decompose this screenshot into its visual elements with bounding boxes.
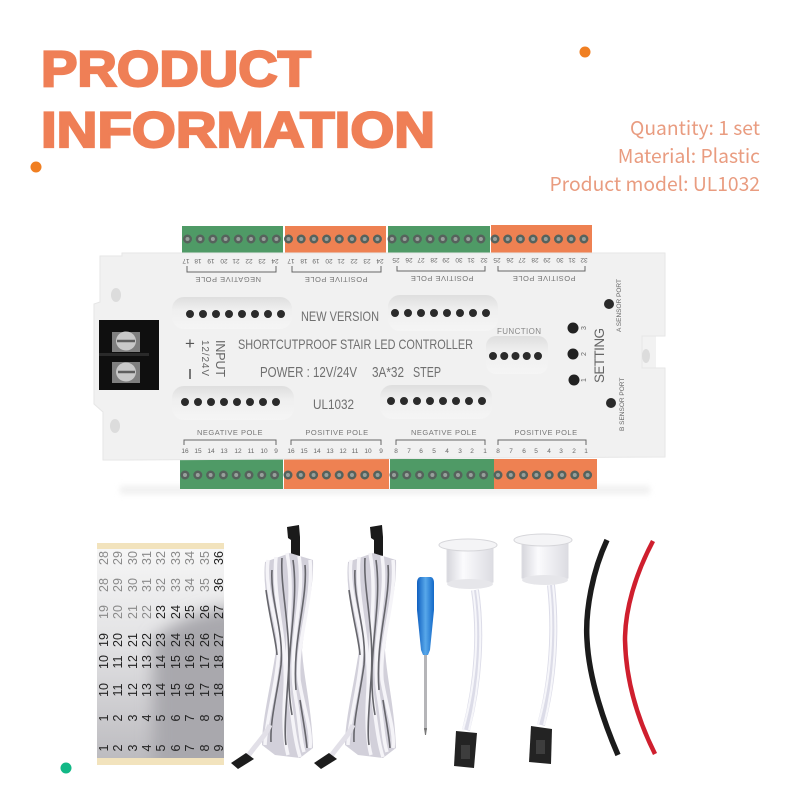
sticker numbers (97, 551, 226, 751)
sticker numbers: 26 (198, 633, 212, 647)
sticker numbers: 35 (198, 551, 212, 565)
sticker numbers: 29 (111, 578, 125, 592)
controller printed text: 2 (581, 352, 588, 356)
sticker numbers: 6 (169, 744, 183, 751)
sticker numbers: 9 (212, 744, 226, 751)
bottom pole labels: 14 (313, 448, 321, 455)
controller printed text: SHORTCUTPROOF STAIR LED CONTROLLER (238, 336, 473, 352)
bottom pole labels: 16 (181, 448, 189, 455)
bottom pole labels: POSITIVE POLE (514, 428, 578, 437)
top terminal blocks (182, 225, 592, 253)
power polarity labels: INPUT (213, 340, 227, 377)
top pole labels: POSITIVE POLE (304, 275, 368, 284)
controller printed text: UL1032 (313, 396, 354, 412)
sticker numbers: 22 (140, 605, 154, 619)
top pole labels: 31 (568, 256, 576, 263)
bottom pole labels: 4 (445, 448, 449, 455)
mounting holes (110, 288, 650, 433)
top pole labels: 32 (580, 256, 588, 263)
controller printed text (238, 279, 626, 431)
controller printed text: STEP (413, 364, 441, 381)
sticker numbers: 21 (126, 605, 140, 619)
power polarity labels: + (185, 334, 195, 353)
sticker numbers: 12 (126, 683, 140, 697)
sticker numbers: 14 (154, 683, 168, 697)
top pole labels: 22 (245, 257, 253, 264)
bottom pole labels: 1 (584, 448, 588, 455)
controller printed text: NEW VERSION (301, 308, 379, 324)
sticker numbers: 3 (126, 714, 140, 721)
title (41, 40, 435, 158)
sensor 1 (439, 539, 497, 768)
top pole labels: 17 (287, 257, 295, 264)
top pole labels: 19 (207, 257, 215, 264)
sticker numbers: 16 (183, 655, 197, 669)
bottom pole labels: 2 (470, 448, 474, 455)
sticker numbers: 11 (111, 683, 125, 696)
controller printed text: 3 (581, 326, 588, 330)
sticker numbers: 3 (126, 744, 140, 751)
sticker numbers: 24 (169, 633, 183, 647)
bottom pole labels: POSITIVE POLE (305, 428, 369, 437)
sticker numbers: 6 (169, 714, 183, 721)
top pole labels: 22 (350, 257, 358, 264)
bottom pole labels: 16 (287, 448, 295, 455)
sticker numbers: 16 (183, 683, 197, 697)
sticker numbers: 5 (154, 714, 168, 721)
bottom pole labels: 1 (483, 448, 487, 455)
top pole labels: 28 (430, 256, 438, 263)
bottom pole labels: NEGATIVE POLE (197, 428, 263, 437)
sticker numbers: 24 (169, 605, 183, 619)
sticker numbers: 7 (183, 744, 197, 751)
top pole labels: 20 (325, 257, 333, 264)
top pole labels: 25 (493, 256, 501, 263)
top pole labels: 31 (467, 256, 475, 263)
bottom pole labels: 8 (394, 448, 398, 455)
sticker numbers: 4 (140, 744, 154, 751)
sticker numbers: 22 (140, 633, 154, 647)
sticker numbers: 20 (111, 633, 125, 647)
recessed vents (172, 295, 548, 420)
sensor ports (604, 299, 616, 408)
controller printed text: POWER : 12V/24V (260, 364, 357, 381)
bottom pole labels: 2 (572, 448, 576, 455)
sticker numbers: 12 (126, 655, 140, 669)
black wire (587, 540, 618, 755)
sticker numbers: 19 (97, 633, 111, 647)
top pole labels: 24 (271, 257, 279, 264)
top pole labels: 30 (556, 256, 564, 263)
controller printed text: B SENSOR PORT (619, 378, 626, 431)
sticker numbers: 30 (126, 551, 140, 565)
bottom pole labels: 6 (419, 448, 423, 455)
top pole labels: POSITIVE POLE (410, 274, 474, 283)
top pole labels: 27 (518, 256, 526, 263)
spec list: Product model: UL1032 (549, 169, 760, 197)
sticker numbers: 36 (212, 551, 226, 565)
sticker numbers: 8 (198, 744, 212, 751)
sticker numbers: 33 (169, 551, 183, 565)
sticker numbers: 20 (111, 605, 125, 619)
cable bundle 1 (231, 525, 313, 769)
sticker numbers: 23 (154, 633, 168, 647)
top pole labels: 25 (392, 256, 400, 263)
sticker numbers: 2 (111, 744, 125, 751)
sticker numbers: 7 (183, 714, 197, 721)
top pole labels: 18 (300, 257, 308, 264)
sticker numbers: 25 (183, 605, 197, 619)
bottom pole labels: 9 (274, 448, 278, 455)
sticker numbers: 25 (183, 633, 197, 647)
sticker numbers: 2 (111, 714, 125, 721)
screwdriver (417, 577, 434, 735)
controller (94, 225, 665, 494)
sticker numbers: 30 (126, 578, 140, 592)
top pole labels: 20 (220, 257, 228, 264)
bottom pole labels: 15 (194, 448, 202, 455)
sticker numbers: 26 (198, 605, 212, 619)
sticker numbers: 34 (183, 578, 197, 592)
bottom pole labels: 12 (234, 448, 242, 455)
bottom pole labels: 13 (220, 448, 228, 455)
sticker numbers: 1 (97, 714, 111, 721)
bottom pole labels: 14 (207, 448, 215, 455)
number sticker sheet (97, 543, 224, 765)
power polarity labels: 12/24V (199, 340, 210, 376)
sticker numbers: 27 (212, 605, 226, 619)
sticker numbers: 18 (212, 683, 226, 697)
bottom pole labels: 11 (352, 448, 359, 455)
sticker numbers: 15 (169, 683, 183, 697)
sticker numbers: 28 (97, 578, 111, 592)
sticker numbers: 13 (140, 683, 154, 697)
top pole labels: 21 (232, 257, 240, 264)
sticker numbers: 34 (183, 551, 197, 565)
sticker numbers: 32 (154, 551, 168, 565)
sensor 2 (514, 534, 572, 764)
sticker numbers: 14 (154, 655, 168, 669)
top pole labels: 29 (442, 256, 450, 263)
controller printed text: FUNCTION (497, 327, 541, 336)
decorative dot: green (60, 762, 72, 774)
sticker numbers: 23 (154, 605, 168, 619)
sticker numbers: 5 (154, 744, 168, 751)
spec list: Material: Plastic (618, 141, 760, 169)
cable bundle 2 (314, 525, 396, 769)
bottom pole labels: 3 (559, 448, 563, 455)
power terminal (99, 320, 159, 390)
power polarity labels (185, 334, 227, 379)
controller printed text: A SENSOR PORT (616, 279, 623, 332)
top pole labels: 32 (480, 256, 488, 263)
top pole labels: 18 (194, 257, 202, 264)
sticker numbers: 36 (212, 578, 226, 592)
controller printed text: SETTING (592, 328, 607, 383)
bottom pole labels: 10 (364, 448, 372, 455)
bottom pole labels: 15 (300, 448, 308, 455)
top pole labels: 23 (258, 257, 266, 264)
title: INFORMATION (41, 101, 435, 158)
sticker numbers: 17 (198, 683, 212, 697)
top pole labels: 23 (363, 257, 371, 264)
controller printed text: 3A*32 (372, 364, 404, 381)
top pole labels: NEGATIVE POLE (195, 275, 261, 284)
sticker numbers: 10 (97, 655, 111, 669)
bottom pole labels: 11 (248, 448, 255, 455)
top pole labels: 28 (531, 256, 539, 263)
bottom pole labels: 6 (522, 448, 526, 455)
sticker numbers: 15 (169, 655, 183, 669)
bottom pole labels: 4 (547, 448, 551, 455)
controller body (94, 253, 665, 460)
spec list (549, 113, 760, 197)
sticker numbers: 9 (212, 714, 226, 721)
title: PRODUCT (41, 40, 311, 97)
top pole labels: 26 (405, 256, 413, 263)
sticker numbers: 1 (97, 744, 111, 751)
bottom pole labels: 12 (339, 448, 347, 455)
bottom pole labels: 7 (509, 448, 513, 455)
function dots (493, 352, 539, 360)
decorative dot: orange top (580, 46, 590, 58)
bottom pole labels: 3 (458, 448, 462, 455)
top pole labels: 17 (182, 257, 190, 264)
sticker numbers: 4 (140, 714, 154, 721)
top pole labels: 27 (417, 256, 425, 263)
sticker numbers: 13 (140, 655, 154, 669)
bottom pole labels (181, 428, 588, 455)
bottom pole labels: 13 (326, 448, 334, 455)
right mounting tab (640, 336, 656, 369)
sticker numbers: 31 (140, 578, 154, 592)
top pole labels: 29 (543, 256, 551, 263)
bottom pole labels: 7 (407, 448, 411, 455)
sticker numbers: 32 (154, 578, 168, 592)
indicator dot rows (185, 313, 487, 402)
top pole labels: 19 (312, 257, 320, 264)
sticker numbers: 29 (111, 551, 125, 565)
sticker numbers: 10 (97, 683, 111, 697)
sticker numbers: 27 (212, 633, 226, 647)
bottom pole labels: 8 (496, 448, 500, 455)
controller printed text: 1 (581, 378, 588, 382)
bottom pole labels: NEGATIVE POLE (411, 428, 477, 437)
spec list: Quantity: 1 set (630, 113, 760, 141)
controller shadow (120, 486, 650, 494)
sticker numbers: 8 (198, 714, 212, 721)
sticker numbers: 18 (212, 655, 226, 669)
bottom pole labels: 10 (260, 448, 268, 455)
decorative dot: orange left (30, 162, 42, 172)
sticker numbers: 11 (111, 655, 125, 668)
top pole labels: 26 (506, 256, 514, 263)
sticker numbers: 21 (126, 633, 140, 647)
red wire (625, 541, 655, 754)
sticker numbers: 33 (169, 578, 183, 592)
sticker numbers: 35 (198, 578, 212, 592)
top pole labels: 24 (376, 257, 384, 264)
bottom pole labels: 9 (379, 448, 383, 455)
sticker numbers: 17 (198, 655, 212, 669)
sticker numbers: 19 (97, 605, 111, 619)
sticker numbers: 28 (97, 551, 111, 565)
top pole labels: 21 (337, 257, 345, 264)
bottom pole labels: 5 (432, 448, 436, 455)
top pole labels: 30 (455, 256, 463, 263)
bottom pole labels: 5 (534, 448, 538, 455)
bottom terminal blocks (180, 459, 597, 489)
setting buttons (568, 322, 580, 386)
top pole labels: POSITIVE POLE (512, 274, 576, 283)
top pole labels (182, 256, 588, 284)
sticker numbers: 31 (140, 551, 154, 565)
